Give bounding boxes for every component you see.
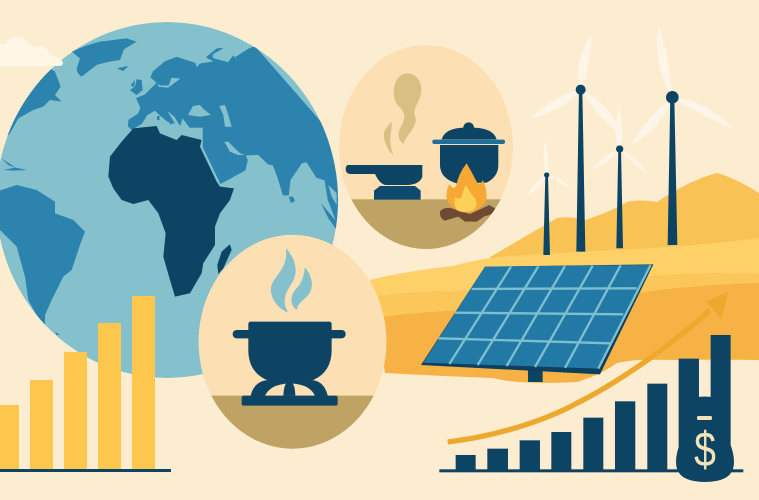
panel face <box>423 265 651 369</box>
inner flame <box>454 185 477 212</box>
smoke <box>384 73 421 155</box>
africa <box>108 126 234 297</box>
money bag: $ <box>694 423 716 477</box>
north america <box>7 69 62 136</box>
panel grid lines <box>438 265 651 369</box>
globe <box>0 22 345 378</box>
eurasia <box>128 47 345 232</box>
fire <box>447 163 487 213</box>
growth arrow <box>448 292 728 442</box>
greenland <box>72 38 137 77</box>
caribbean islands <box>2 158 27 171</box>
burner <box>374 186 421 200</box>
turbine 1 <box>527 140 572 255</box>
south america <box>0 185 85 335</box>
turbine 4 <box>632 25 733 245</box>
madagascar <box>217 244 232 274</box>
inland seas <box>188 105 337 205</box>
investment bar chart <box>439 292 743 472</box>
left chart baseline <box>0 469 171 472</box>
panel post <box>528 370 543 382</box>
yellow landscape bands <box>370 238 759 383</box>
solar panel <box>421 264 653 382</box>
turbine 3 <box>591 107 647 248</box>
british isles <box>130 79 143 95</box>
back hills <box>490 173 759 300</box>
table surface <box>351 199 501 249</box>
chart baseline <box>439 469 743 472</box>
frying pan <box>346 165 422 185</box>
money bag <box>676 396 734 482</box>
wind turbines <box>527 25 733 255</box>
pot lid <box>442 122 497 139</box>
table surface <box>211 396 374 449</box>
panel: lower cooking circle <box>190 235 390 452</box>
navy bars <box>456 335 731 471</box>
stove base <box>242 396 338 406</box>
cloud <box>0 37 63 66</box>
logs <box>440 205 495 222</box>
panel: upper cooking circle <box>339 45 513 249</box>
mediterranean islands <box>157 116 173 125</box>
indonesia <box>321 203 337 230</box>
pot handles <box>233 330 346 338</box>
iceland <box>117 66 128 71</box>
pot body <box>440 145 498 183</box>
panel frame <box>421 264 653 374</box>
pot body <box>248 322 332 380</box>
stove burner ring <box>250 380 328 396</box>
burner flame <box>283 382 295 396</box>
steam <box>271 248 312 313</box>
turbine 2 <box>531 33 623 252</box>
sri lanka <box>289 196 295 203</box>
pot rim <box>432 140 505 144</box>
bar chart: yellow bars <box>0 296 155 470</box>
